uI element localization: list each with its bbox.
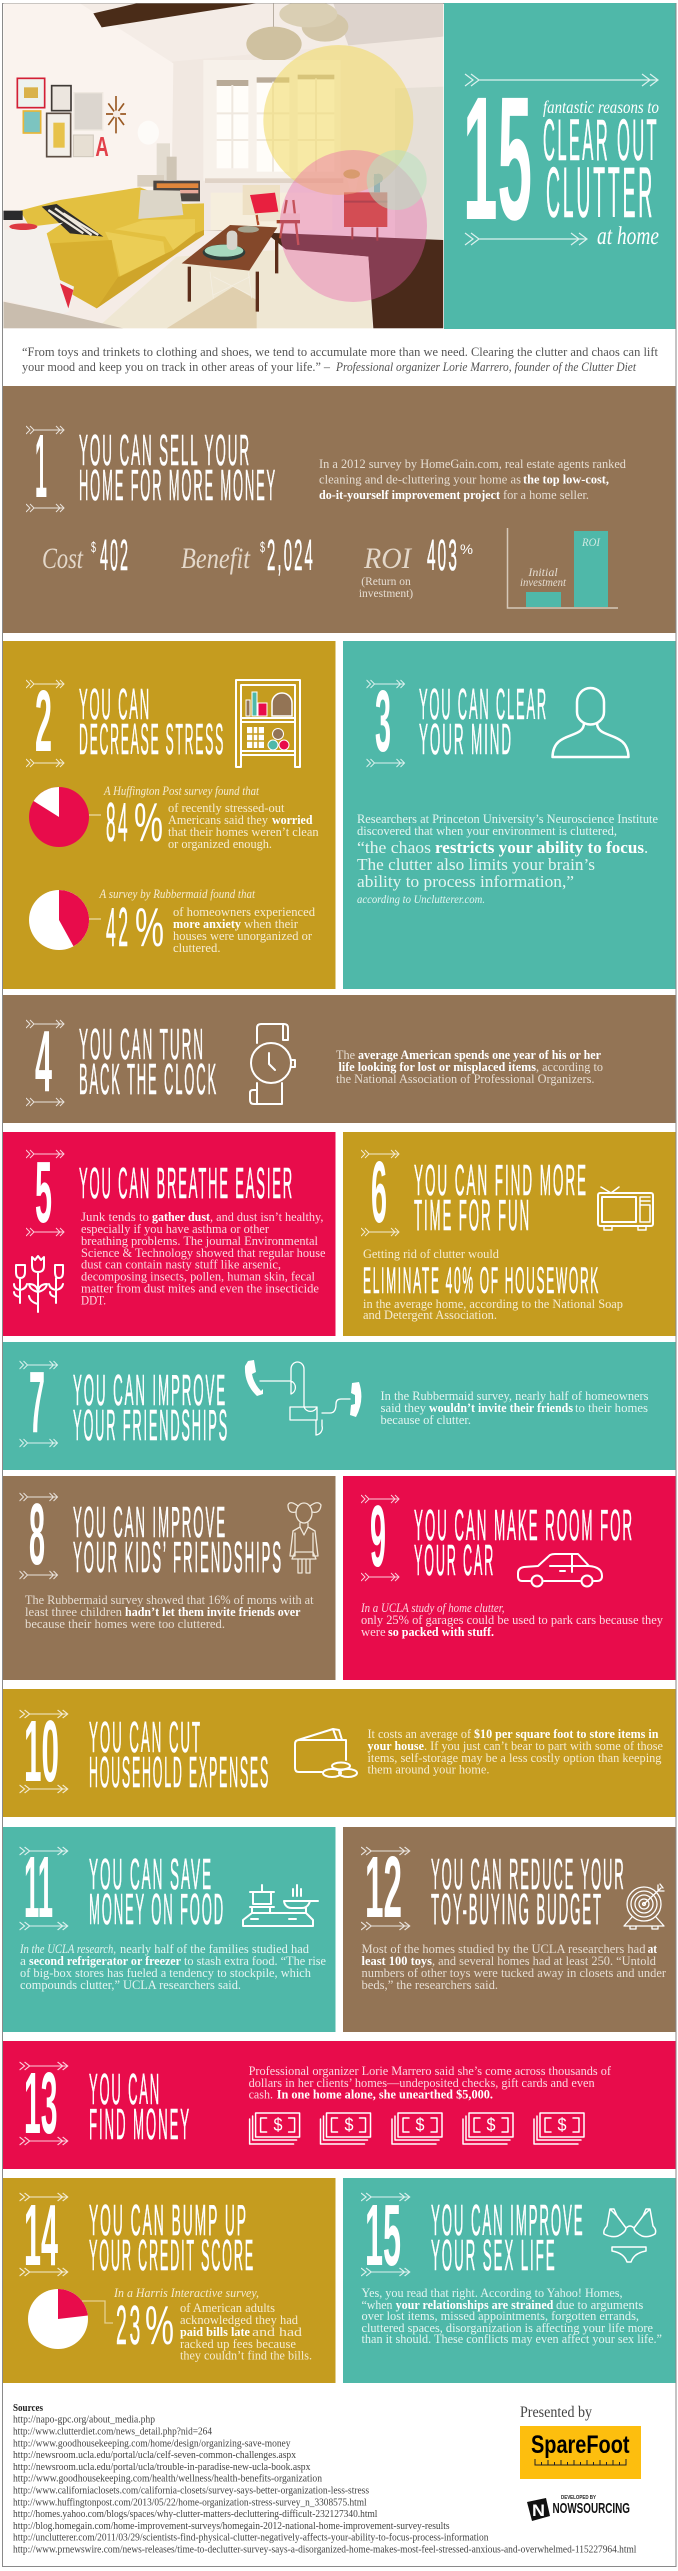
intro quote: “From toys and trinkets to clothing and shoes, we tend to accumulate more than we need. Clearing the clutter and chaos can lift	[22, 345, 658, 359]
body text 7: said they	[380, 1401, 427, 1415]
stat: cost: $	[91, 539, 96, 556]
panel 9: room for your car	[343, 1476, 676, 1680]
logo: NowSourcing: DEVELOPED BY	[561, 2495, 597, 2501]
icon: person silhouette	[552, 688, 628, 757]
panel 8 background	[3, 1476, 336, 1680]
stat text: 84 percent: %	[134, 791, 163, 853]
panel 11 background	[3, 1827, 336, 2032]
body text 8: The Rubbermaid survey showed that 16% of moms with at	[25, 1593, 314, 1607]
stat text: 23 percent: they couldn’t find the bills.	[180, 2348, 312, 2362]
body text 10: items, self-storage may be a less costly option than keeping	[368, 1751, 662, 1765]
body text 1: cleaning and de-cluttering your home as	[319, 472, 521, 486]
panel 4 background	[3, 995, 676, 1123]
sources list	[13, 2403, 637, 2556]
arrow pair 11	[20, 1847, 68, 1930]
panel 5: breathe easier: 5	[35, 1144, 52, 1241]
stat text: 42 percent: when their	[244, 917, 299, 931]
stat: return on investment	[359, 531, 473, 600]
panel 14 background	[3, 2178, 336, 2383]
stat: return on investment: investment)	[359, 588, 413, 600]
icon: target with arrow	[624, 1884, 664, 1929]
hero photo: living room: A	[95, 131, 109, 162]
body text 12	[362, 1942, 667, 1992]
arrow pair 6	[361, 1150, 399, 1236]
heading 9	[414, 1501, 634, 1585]
body text 7: to their homes	[575, 1401, 648, 1415]
title script: at home: at home	[597, 223, 659, 250]
sources list: http://napo-gpc.org/about_media.php	[13, 2415, 155, 2426]
body text 5: dust can contain nasty stuff like arsenic,	[81, 1258, 281, 1272]
panel 3: clear your mind	[343, 641, 676, 989]
icons: five stacks of dollar bills: $	[344, 2115, 354, 2135]
body text 3: “the chaos	[357, 838, 431, 857]
panel 13: find money: FIND MONEY	[89, 2100, 191, 2149]
stat text: 84 percent: 84	[106, 791, 130, 853]
side cabinet	[137, 175, 164, 187]
stat text: 84 percent: Americans said they	[168, 813, 269, 827]
panel 6: time for fun	[343, 1132, 676, 1336]
panel 14: credit score	[3, 2178, 336, 2383]
body text 13	[249, 2064, 612, 2102]
logo: SpareFoot	[520, 2426, 641, 2479]
icons: five stacks of dollar bills: $	[416, 2115, 424, 2135]
sources list: http://blog.homegain.com/home-improvement-surveys/homegain-2012-national-home-improvement-survey-results	[13, 2521, 450, 2532]
stat text: 23 percent: In a Harris Interactive survey,	[113, 2285, 259, 2300]
text: YOU CAN BUMP UP	[89, 2196, 248, 2245]
arrow pair 14	[20, 2193, 68, 2276]
sources list: http://homes.yahoo.com/blogs/spaces/why-clutter-matters-decluttering-difficult-232127340.html	[13, 2509, 378, 2520]
panel 1: sell your home: 2,024	[267, 531, 315, 580]
body text 13: In one home alone, she unearthed $5,000.	[277, 2088, 493, 2102]
stat text: 42 percent: houses were unorganized or	[173, 929, 313, 943]
heading 1	[79, 426, 277, 510]
arrow: title top	[465, 74, 658, 86]
arrow pair 4	[26, 1020, 64, 1106]
stat: return on investment: 403	[427, 531, 459, 580]
body text 5: Science & Technology showed that regular house	[81, 1246, 326, 1260]
body text 11	[19, 1942, 326, 1992]
body text 15: than it should. These conflicts may even affect your sex life.”	[362, 2332, 662, 2346]
body text 8: hadn’t let them invite friends over	[125, 1605, 301, 1619]
sources list: http://www.goodhousekeeping.com/home/design/organizing-save-money	[13, 2438, 290, 2449]
icon: stove with pots	[243, 1885, 318, 1926]
body text 9	[360, 1601, 664, 1639]
icon: car	[518, 1554, 602, 1581]
logo: NowSourcing: NOWSOURCING	[552, 2500, 630, 2517]
body text 5: , and dust isn’t healthy,	[210, 1210, 323, 1224]
body text 15	[362, 2286, 662, 2346]
body text 8: because their homes were too cluttered.	[25, 1617, 225, 1631]
panel 13: find money: 13	[24, 2055, 58, 2152]
body text 3: ability to process information,”	[357, 872, 574, 891]
body text 5: Junk tends to	[81, 1210, 149, 1224]
bar chart: ROI vs initial investment: investment	[520, 575, 567, 589]
panel 11: save money on food: YOU CAN SAVE	[89, 1850, 213, 1899]
heading 2	[79, 680, 225, 764]
panel 12: toy-buying budget	[343, 1827, 676, 2032]
body text 10: It costs an average of	[368, 1727, 472, 1741]
body text 1: for a home seller.	[503, 488, 589, 502]
body text 8: least three children	[25, 1605, 123, 1619]
stat: cost	[42, 531, 130, 580]
body text 5: breathing problems. The journal Environmental	[81, 1234, 319, 1248]
body text 11: nearly half of the families studied had	[120, 1942, 310, 1956]
body text 3: The clutter also limits your brain’s	[357, 855, 595, 874]
intro quote: your mood and keep you on track in other areas of your life.” –	[22, 360, 331, 374]
stat text: 84 percent: worried	[272, 813, 313, 827]
body text 4: The	[336, 1048, 355, 1062]
heading 13	[89, 2065, 191, 2149]
body text 15: Yes, you read that right. According to Yahoo! Homes,	[362, 2286, 622, 2300]
body text 11: to stash extra food. “The rise	[184, 1954, 326, 1968]
icon: tulips	[14, 1256, 63, 1312]
stat: cost: Cost	[42, 542, 83, 575]
panel 2: decrease stress: 2	[35, 673, 52, 770]
body text 12: least 100 toys	[362, 1954, 432, 1968]
body text 4: average American spends one year of his or her	[358, 1048, 601, 1062]
panel 6: time for fun: 6	[371, 1144, 387, 1241]
panel 4: turn back the clock: YOU CAN TURN	[79, 1020, 205, 1069]
stat: return on investment: ROI	[363, 542, 413, 575]
panel 8: kids' friendships	[3, 1476, 336, 1680]
body text 5: DDT.	[81, 1293, 106, 1307]
body text 5: matter from dust mites and even the insecticide	[81, 1282, 319, 1296]
body text 10: $10 per square foot to store items in	[474, 1727, 659, 1741]
body text 7: wouldn’t invite their friends	[429, 1401, 573, 1415]
icons: five stacks of dollar bills: $	[486, 2115, 496, 2135]
body text 11: compounds clutter,” UCLA researchers said.	[20, 1978, 241, 1992]
body text 3: according to Unclutterer.com.	[357, 894, 485, 906]
heading 2: YOU CAN	[79, 680, 151, 729]
stat text: 23 percent: 23	[116, 2294, 143, 2356]
arrow pair 10	[20, 1710, 68, 1793]
title background	[444, 3, 676, 329]
panel 12 background	[343, 1827, 676, 2032]
sources list: http://newsroom.ucla.edu/portal/ucla/celf-seven-common-challenges.aspx	[13, 2450, 296, 2461]
body text 3: discovered that when your environment is cluttered,	[357, 824, 617, 838]
panel 10: cut household expenses: 10	[24, 1703, 59, 1800]
body text 12: at	[648, 1942, 658, 1956]
body text 8	[25, 1593, 314, 1631]
body text 1	[319, 457, 627, 502]
stat text: 42 percent: 42	[106, 896, 131, 958]
body text 3: .	[644, 838, 648, 857]
sources list: http://www.goodhousekeeping.com/health/wellness/health-benefits-organization	[13, 2474, 322, 2485]
panel 1: sell your home	[3, 386, 676, 633]
body text 10: . If you just can’t bear to part with some of those	[424, 1739, 663, 1753]
colour overlay circles	[263, 45, 413, 195]
body text 5	[81, 1210, 326, 1307]
body text 5: especially if you have asthma or other	[81, 1222, 270, 1236]
panel 4: turn back the clock: BACK THE CLOCK	[79, 1055, 218, 1104]
arrow pair 8	[20, 1493, 58, 1579]
body text 5: gather dust	[152, 1210, 211, 1224]
stat: benefit	[181, 531, 315, 580]
stat text: 84 percent: or organized enough.	[168, 837, 272, 851]
bar chart: ROI vs initial investment: Initial	[527, 565, 558, 579]
heading 3	[419, 680, 548, 764]
hero photo: living room	[3, 1, 443, 328]
sources list: http://newsroom.ucla.edu/portal/ucla/trouble-in-paradise-new-ucla-book.aspx	[13, 2462, 310, 2473]
body text 7: In the Rubbermaid survey, nearly half of homeowners	[380, 1389, 649, 1403]
body text 6	[363, 1247, 623, 1322]
arrow pair 3	[366, 680, 404, 767]
body text 1: do-it-yourself improvement project	[319, 488, 501, 502]
body text 9: were	[361, 1625, 386, 1639]
stat text: 84 percent	[103, 784, 319, 853]
stat: return on investment: (Return on	[361, 576, 411, 588]
body text 5: decomposing insects, pollen, human skin, fecal	[81, 1270, 316, 1284]
panel 1: sell your home: 1	[35, 417, 47, 517]
body text 12: numbers of other toys were tucked away in closets and under	[362, 1966, 667, 1980]
icon: television	[598, 1187, 653, 1230]
body text 15: your relationships are strained	[396, 2298, 553, 2312]
panel 13: find money	[3, 2041, 676, 2169]
panel 3 background	[343, 641, 676, 989]
sources list: http://www.clutterdiet.com/news_detail.php?nid=264	[13, 2426, 212, 2438]
body text 3: Researchers at Princeton University’s Neuroscience Institute	[357, 812, 658, 826]
panel 7: improve friendships: YOU CAN IMPROVE	[73, 1366, 227, 1415]
body text 1: In a 2012 survey by HomeGain.com, real estate agents ranked	[319, 457, 627, 471]
panel 8: kids' friendships: YOU CAN IMPROVE	[73, 1498, 227, 1547]
arrow pair 9	[361, 1495, 399, 1581]
panel 1 background	[3, 386, 676, 633]
arrow: title bottom	[465, 233, 587, 245]
panel 1: sell your home: YOU CAN SELL YOUR	[79, 426, 251, 475]
heading 15	[431, 2196, 584, 2280]
stat text: 42 percent: %	[135, 896, 164, 958]
body text 12: Most of the homes studied by the UCLA researchers had	[362, 1942, 646, 1956]
body text 10: your house	[368, 1739, 424, 1753]
body text 6: and Detergent Association.	[363, 1308, 497, 1322]
panel 10: cut household expenses	[3, 1689, 676, 1817]
pictures on the wall	[17, 78, 45, 108]
body text 4: the National Association of Professional Organizers.	[336, 1072, 594, 1086]
body text 11: of big-box stores has fueled a tendency to stockpile, which	[20, 1966, 312, 1980]
body text 11: In the UCLA research,	[19, 1942, 116, 1956]
panel 1: sell your home: 402	[100, 531, 130, 580]
body text 9: only 25% of garages could be used to park cars because they	[361, 1613, 664, 1627]
panel 7 background	[3, 1342, 676, 1470]
panel 12: toy-buying budget: 12	[365, 1839, 402, 1936]
stat text: 42 percent: more anxiety	[173, 917, 242, 931]
panel 6 background	[343, 1132, 676, 1336]
body text 7	[380, 1389, 649, 1427]
stat: return on investment: %	[460, 541, 473, 557]
sources list: http://unclutterer.com/2011/03/29/scientists-find-physical-clutter-negatively-affects-your-ability-to-focus-process-information	[13, 2533, 488, 2544]
panel 9: room for your car: 9	[370, 1488, 386, 1585]
body text 13: Professional organizer Lorie Marrero said she’s come across thousands of	[249, 2064, 612, 2078]
panel 13 background	[3, 2041, 676, 2169]
stat text: 23 percent: paid bills late	[180, 2324, 250, 2339]
panel 7: improve friendships: 7	[29, 1354, 45, 1451]
stat text: 42 percent	[99, 887, 316, 958]
body text 4: life looking for lost or misplaced items	[338, 1060, 536, 1074]
body text 11: second refrigerator or freezer	[29, 1954, 181, 1968]
icons: five stacks of dollar bills: $	[558, 2115, 566, 2135]
panel 11: save money on food: MONEY ON FOOD	[89, 1885, 225, 1934]
heading 6	[414, 1156, 588, 1240]
heading 14	[89, 2196, 255, 2280]
body text 13: dollars in her clients’ homes—undeposited checks, gift cards and even	[249, 2076, 595, 2090]
panel 5: breathe easier	[3, 1132, 336, 1336]
bar chart: ROI vs initial investment	[508, 528, 618, 608]
sources list: Sources	[13, 2403, 43, 2414]
body text 12: , and several homes had at least 250. “Untold	[432, 1954, 657, 1968]
stat text: 23 percent: and had	[252, 2324, 303, 2339]
stat text: 23 percent	[113, 2285, 312, 2362]
panel 5 background	[3, 1132, 336, 1336]
dresser and plant	[344, 192, 387, 227]
heading 11	[89, 1850, 225, 1934]
sources list: http://www.californiaclosets.com/california-closets/survey-says-better-organization-less-stress	[13, 2486, 369, 2496]
icons: five stacks of dollar bills	[250, 2113, 584, 2144]
text: DECREASE STRESS	[79, 715, 225, 764]
heading 12	[431, 1850, 626, 1934]
sofa	[20, 187, 204, 308]
stat text: 23 percent: %	[145, 2294, 174, 2356]
icons: five stacks of dollar bills: $	[274, 2115, 282, 2135]
heading 10	[89, 1713, 270, 1797]
text: YOUR CREDIT SCORE	[89, 2231, 255, 2280]
white table	[31, 222, 74, 295]
title panel	[444, 3, 676, 329]
body text 10: them around your home.	[368, 1762, 490, 1776]
body text 15: cluttered spaces, disorganization is affecting your life more	[362, 2321, 653, 2335]
pie chart: 23 percent	[28, 2289, 113, 2349]
panel 2 background	[3, 641, 336, 989]
stat text: 42 percent: A survey by Rubbermaid found that	[99, 887, 255, 901]
chair	[243, 185, 280, 215]
stat text: 84 percent: A Huffington Post survey found that	[103, 784, 259, 798]
logo: SpareFoot: SpareFoot	[531, 2431, 630, 2459]
heading 8	[73, 1498, 283, 1582]
body text 1: the top low-cost,	[523, 472, 609, 486]
title panel: 15	[463, 61, 532, 257]
icon: bra and underwear	[604, 2209, 656, 2262]
arrow pair 7	[20, 1361, 58, 1447]
panel 15: sex life	[343, 2178, 676, 2383]
sources list: http://www.prnewswire.com/news-releases/time-to-declutter-survey-says-a-disorganized-home-makes-most-feel-stressed-anxious-and-overwhelmed-115227964.html	[13, 2544, 637, 2556]
panel 8: kids' friendships: 8	[29, 1486, 45, 1583]
arrow pair 5	[26, 1150, 64, 1236]
bar chart: ROI vs initial investment: ROI	[581, 535, 601, 549]
icon: wristwatch	[250, 1024, 295, 1104]
body text 7: because of clutter.	[380, 1413, 471, 1427]
arrow pair 12	[361, 1847, 410, 1930]
stat text: 23 percent: of American adults	[180, 2300, 275, 2315]
stat text: 84 percent: that their homes weren’t clean	[168, 825, 319, 839]
panel 4: turn back the clock: 4	[35, 1013, 52, 1110]
body text 12: beds,” the researchers said.	[362, 1978, 498, 1992]
panel 7: improve friendships	[3, 1342, 676, 1470]
body text 15: due to arguments	[556, 2298, 643, 2312]
panel 10 background	[3, 1689, 676, 1817]
arrow pair 15	[361, 2193, 410, 2276]
body text 4: , according to	[536, 1060, 603, 1074]
body text 9: In a UCLA study of home clutter,	[360, 1601, 504, 1615]
icon: wallet and coins	[295, 1729, 357, 1777]
coffee table	[182, 225, 277, 271]
heading 4	[79, 1020, 218, 1104]
stat text: 42 percent: of homeowners experienced	[173, 905, 316, 919]
pie chart: 42 percent	[29, 890, 101, 950]
panel 10: cut household expenses: YOU CAN CUT	[89, 1713, 202, 1762]
icon: car wheels	[532, 1576, 592, 1586]
presented by credit: Presented by	[520, 2404, 592, 2421]
panel 15: sex life: 15	[365, 2187, 401, 2284]
body text 9: so packed with stuff.	[388, 1625, 494, 1639]
stat: benefit: $	[260, 539, 265, 556]
body text 15: over lost items, missed appointments, forgotten errands,	[362, 2309, 639, 2323]
arrow pair 1	[26, 426, 64, 512]
sources list: http://www.huffingtonpost.com/2013/05/22/home-organization-stress-survey_n_3308575.html	[13, 2497, 367, 2508]
panel 3: clear your mind: 3	[375, 673, 391, 770]
body text 6: in the average home, according to the National Soap	[363, 1297, 623, 1311]
panel 7: improve friendships: YOUR FRIENDSHIPS	[73, 1401, 229, 1450]
body text 6: Getting rid of clutter would	[363, 1247, 500, 1261]
body text 15: “when	[362, 2298, 393, 2312]
panel 15 background	[343, 2178, 676, 2383]
heading 7	[73, 1366, 229, 1450]
logo: NowSourcing	[527, 2495, 630, 2521]
stat text: 23 percent: acknowledged they had	[180, 2312, 298, 2327]
panel 11: save money on food	[3, 1827, 336, 2032]
intro quote	[22, 345, 658, 374]
body text 10	[368, 1727, 663, 1776]
body text 4	[336, 1048, 603, 1086]
panel 9 background	[343, 1476, 676, 1680]
stat text: 42 percent: cluttered.	[173, 941, 220, 955]
panel 4: turn back the clock	[3, 995, 676, 1123]
intro quote: Professional organizer Lorie Marrero, founder of the Clutter Diet	[335, 360, 636, 374]
stat text: 23 percent: racked up fees because	[180, 2336, 296, 2351]
panel 13: find money: YOU CAN	[89, 2065, 161, 2114]
body text 3: restricts your ability to focus	[435, 838, 644, 857]
body text 3	[357, 812, 658, 906]
logo: NowSourcing: N	[532, 2501, 545, 2520]
panel 11: save money on food: 11	[24, 1839, 53, 1936]
icon: girl with pigtails	[288, 1503, 321, 1573]
arrow pair 13	[20, 2062, 68, 2145]
panel 2: decrease stress	[3, 641, 336, 989]
stat: benefit: Benefit	[181, 542, 251, 575]
icon: bookshelf	[236, 680, 300, 767]
stat text: 84 percent: of recently stressed-out	[168, 801, 285, 815]
icon: telephone handsets and cord	[245, 1360, 361, 1435]
arrow pair 2	[26, 680, 64, 767]
body text 13: cash.	[249, 2088, 273, 2102]
panel 14: credit score: 14	[24, 2187, 58, 2284]
body text 11: a	[20, 1954, 26, 1968]
pie chart: 84 percent	[29, 787, 101, 847]
